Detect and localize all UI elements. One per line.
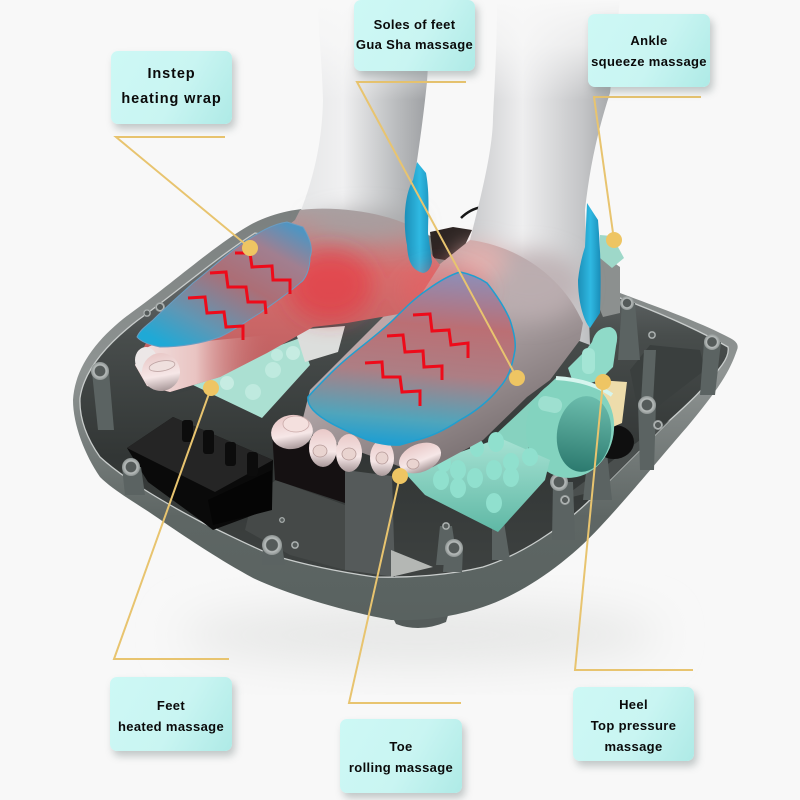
- callout: feet: Feet: [157, 698, 185, 713]
- callout: soles of feet: Soles of feet: [374, 17, 455, 32]
- shell interior: [80, 233, 728, 577]
- callout: heel: Top pressure: [591, 718, 676, 733]
- red heat glow: [288, 249, 487, 321]
- heat zigzags: [188, 253, 468, 406]
- screw posts: [91, 296, 721, 572]
- left foot: [135, 209, 440, 394]
- left massage roller: [193, 326, 345, 418]
- ankle squeeze pad left: [405, 162, 432, 273]
- callout: soles of feet: [354, 0, 475, 71]
- black box: [127, 417, 273, 530]
- leader lines: [114, 82, 701, 703]
- soft transition between legs and feet: [310, 211, 582, 320]
- right ankle bracket: [596, 235, 624, 317]
- heating pad left: [137, 222, 311, 347]
- shell body: [73, 208, 738, 620]
- callout: toe: rolling massage: [349, 760, 453, 775]
- base foot: [390, 612, 449, 628]
- callout: instep heating wrap: heating wrap: [121, 91, 222, 107]
- callout: feet: [110, 677, 232, 751]
- callout: heel: [573, 687, 694, 761]
- callout: ankle: [588, 14, 710, 87]
- legs: [295, 0, 630, 345]
- callout: heel: massage: [604, 739, 663, 754]
- callout: heel: Heel: [619, 697, 648, 712]
- callout: toe: Toe: [389, 739, 413, 754]
- right massage roller: [404, 432, 550, 532]
- callout: instep heating wrap: [111, 51, 232, 124]
- background shading: [180, 605, 660, 665]
- dark part and arc behind legs: [430, 207, 482, 262]
- ankle squeeze pad right: [578, 203, 601, 328]
- right massage ring: [493, 327, 621, 484]
- interior structure: [160, 320, 705, 577]
- callout: soles of feet: Gua Sha massage: [356, 37, 473, 52]
- heating pad right: [308, 272, 515, 445]
- callout: instep heating wrap: Instep: [147, 66, 196, 82]
- callout: ankle: squeeze massage: [591, 54, 707, 69]
- black motor cylinder: [594, 425, 634, 459]
- callout: ankle: Ankle: [630, 33, 668, 48]
- callout: toe: [340, 719, 462, 793]
- leader dots: [203, 232, 622, 484]
- right foot: [268, 240, 583, 479]
- callout: feet: heated massage: [118, 719, 224, 734]
- beige block: [598, 380, 627, 430]
